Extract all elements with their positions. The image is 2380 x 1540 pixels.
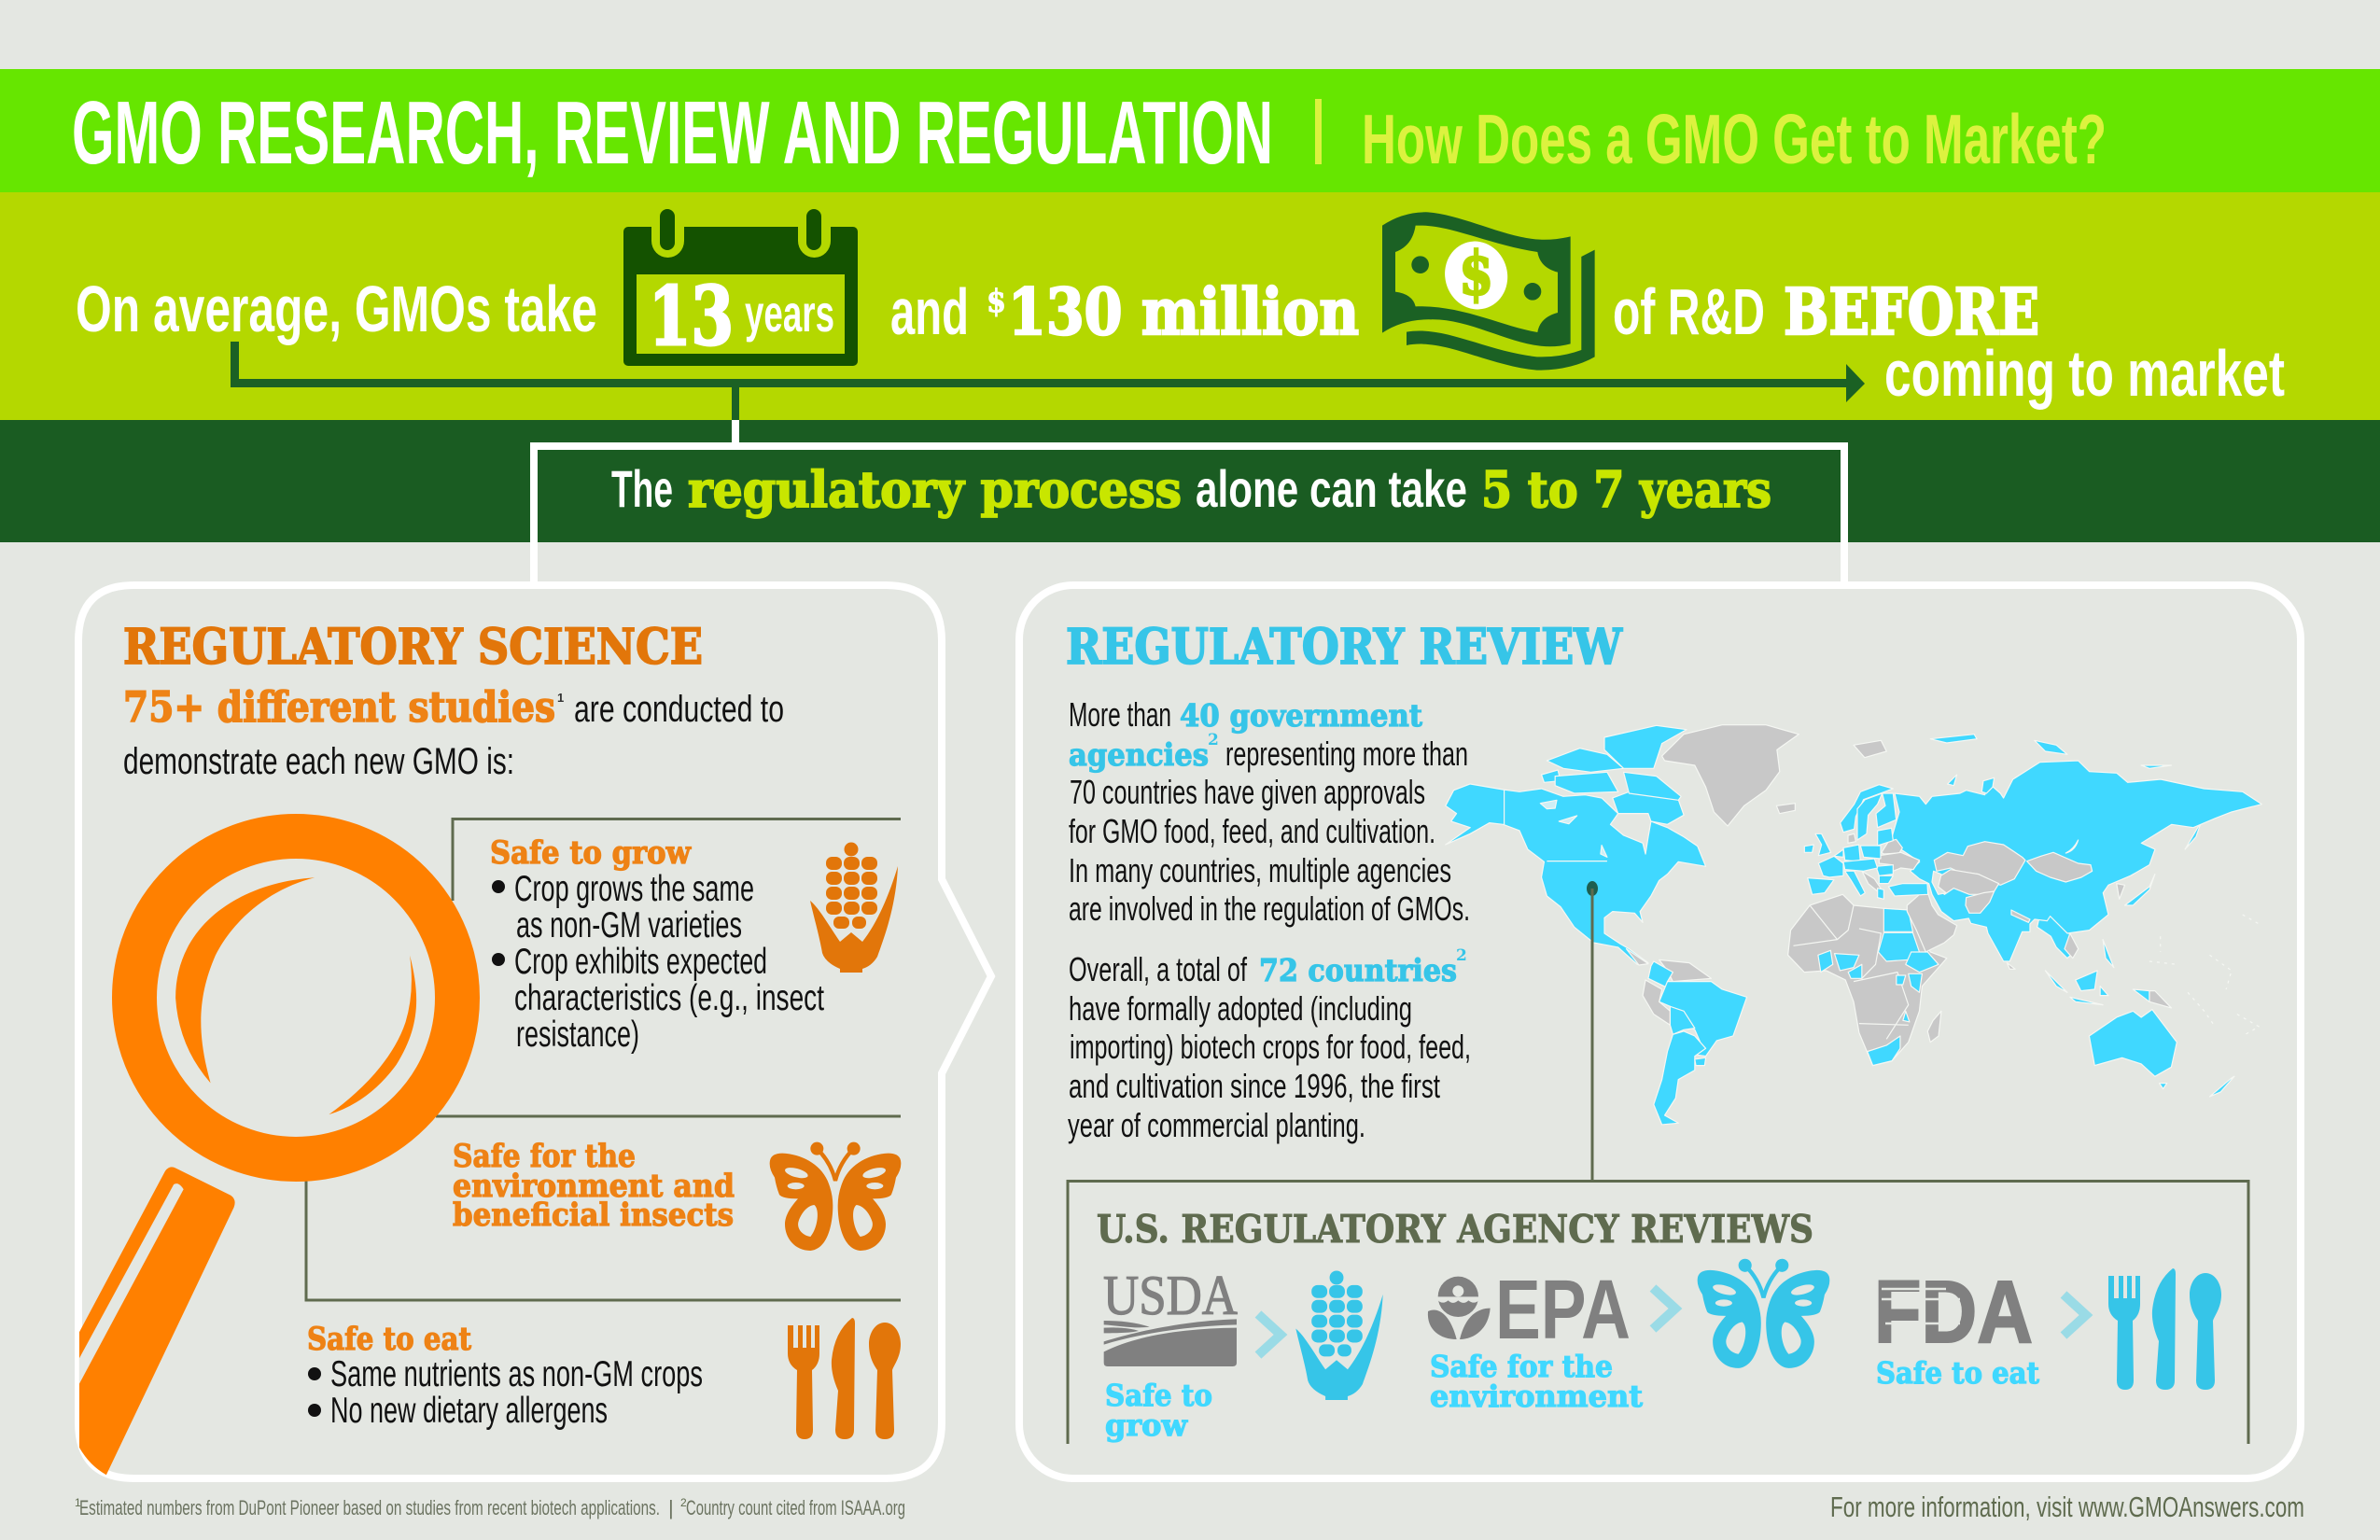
footnotes: | <box>668 1496 674 1519</box>
text: government agencies: agencies <box>1069 736 1209 773</box>
icon: magnifying glass <box>79 836 457 1475</box>
text: government agencies: More than <box>1069 695 1171 734</box>
label: safe for the environment: Safe for the <box>1430 1349 1613 1384</box>
text: 72 countries <box>1068 946 1471 1144</box>
block: safe to grow: Crop grows the same <box>514 869 754 909</box>
text: of R&D BEFORE <box>1613 275 2039 350</box>
map: world <box>1446 725 2261 1125</box>
block: safe to grow <box>490 834 824 1055</box>
panel outline <box>1019 585 2301 1478</box>
arrow: FDA to utensils <box>2064 1295 2086 1336</box>
footnotes: Estimated numbers from DuPont Pioneer based on studies from recent biotech applications. <box>79 1496 660 1519</box>
intro text: are conducted to <box>574 689 784 730</box>
label: safe for the environment <box>1430 1349 1643 1414</box>
logo: USDA: USDA <box>1103 1265 1238 1326</box>
text: 72 countries: have formally adopted (including <box>1069 989 1412 1028</box>
icon: calendar with 13 years: 13 <box>649 270 734 364</box>
text: government agencies: are involved in the regulation of GMOs. <box>1069 889 1470 928</box>
label: safe to eat: Safe to eat <box>1876 1355 2039 1391</box>
block: safe to grow: characteristics (e.g., insect <box>514 978 824 1018</box>
text: government agencies: 2 <box>1208 731 1219 749</box>
text: regulatory process alone can take 5 to 7 years: 5 to 7 years <box>1481 461 1771 519</box>
box heading: U.S. REGULATORY AGENCY REVIEWS <box>1097 1207 1813 1252</box>
text: regulatory process alone can take 5 to 7 years: alone can take <box>1196 459 1467 518</box>
logo: FDA: FDA <box>1874 1263 2033 1362</box>
band: yellow-green timeline band <box>0 192 2380 420</box>
label: safe to grow <box>1105 1378 1212 1443</box>
arrow: USDA to corn <box>1258 1314 1281 1355</box>
intro text: 75+ different studies <box>123 682 555 732</box>
intro text: demonstrate each new GMO is: <box>123 741 514 782</box>
text: 72 countries: and cultivation since 1996, the first <box>1069 1067 1440 1105</box>
icon: butterfly <box>1698 1259 1829 1368</box>
block: safe for the environment: beneficial insects <box>453 1197 734 1234</box>
title: GMO RESEARCH, REVIEW AND REGULATION <box>72 83 1273 183</box>
logo: EPA <box>1428 1264 1631 1357</box>
icon: fork knife spoon <box>788 1318 901 1439</box>
icon: corn <box>1295 1271 1383 1400</box>
icon: corn <box>810 842 898 973</box>
text: 72 countries: 72 countries <box>1259 952 1457 988</box>
panel: regulatory review <box>1019 585 2301 1478</box>
band: bright green title band <box>0 69 2380 192</box>
text: government agencies: In many countries, multiple agencies <box>1069 851 1451 889</box>
text: regulatory process alone can take 5 to 7 years <box>611 459 1771 519</box>
arrow: EPA to butterfly <box>1653 1288 1675 1329</box>
panel outline with arrow <box>78 585 991 1478</box>
text: regulatory process alone can take 5 to 7 years: The <box>611 459 673 518</box>
panel: regulatory science <box>78 585 991 1478</box>
block: safe to grow: resistance) <box>516 1015 639 1055</box>
block: safe for the environment <box>453 1138 735 1234</box>
icon: calendar with 13 years: years <box>745 284 834 343</box>
label: safe to grow: grow <box>1105 1407 1188 1443</box>
icon: butterfly <box>770 1142 901 1251</box>
heading: REGULATORY SCIENCE <box>123 619 703 676</box>
text: on average GMOs take: On average, GMOs take <box>76 273 597 345</box>
block: safe to eat: No new dietary allergens <box>330 1391 608 1431</box>
title divider <box>1315 99 1322 164</box>
map pointer <box>1587 881 1598 1181</box>
text: of R&D BEFORE: of R&D <box>1613 275 1765 348</box>
arrow: timeline <box>231 342 1865 420</box>
logo: USDA <box>1103 1265 1238 1366</box>
icon: fork knife spoon <box>2108 1268 2221 1390</box>
heading: REGULATORY REVIEW <box>1066 619 1623 676</box>
text: and $130 million: and <box>890 275 969 348</box>
text: and $130 million: $ <box>987 283 1006 320</box>
block: safe to eat: Safe to eat <box>307 1321 471 1358</box>
block: safe to grow: Crop exhibits expected <box>514 942 767 982</box>
footnotes: 2 <box>680 1496 687 1509</box>
text: government agencies <box>1069 695 1470 928</box>
icon: money bills <box>1382 212 1595 371</box>
label: safe for the environment: environment <box>1430 1379 1643 1414</box>
icon: calendar with 13 years <box>623 209 858 366</box>
text: and $130 million: 130 million <box>1008 275 1359 350</box>
text: 72 countries: Overall, a total of <box>1069 950 1248 988</box>
intro text: 1 <box>557 691 564 705</box>
block: safe to eat: Same nutrients as non-GM crops <box>330 1354 703 1394</box>
footnotes: Country count cited from ISAAA.org <box>686 1496 905 1519</box>
label: safe to grow: Safe to <box>1105 1378 1212 1413</box>
text: government agencies: 70 countries have given approvals <box>1070 773 1425 811</box>
logo: EPA: EPA <box>1495 1264 1631 1357</box>
block: safe for the environment: Safe for the <box>453 1138 636 1175</box>
text: regulatory process alone can take 5 to 7 years: regulatory process <box>688 461 1182 519</box>
text: 72 countries: year of commercial planting. <box>1068 1106 1365 1144</box>
band: dark green regulatory band <box>0 420 2380 542</box>
intro text <box>123 682 784 782</box>
text: government agencies: 40 government <box>1180 697 1423 734</box>
text: 72 countries: 2 <box>1456 946 1467 965</box>
regulatory process bracket <box>534 420 1844 588</box>
text: government agencies: for GMO food, feed, and cultivation. <box>1069 812 1435 850</box>
block: safe to grow: Safe to grow <box>490 834 692 872</box>
text: of R&D BEFORE: BEFORE <box>1784 275 2039 350</box>
text: government agencies: representing more than <box>1225 735 1468 773</box>
box: U.S. regulatory agency reviews <box>1068 1182 2248 1444</box>
section divider lines <box>306 819 901 1300</box>
block: safe to grow: as non-GM varieties <box>516 905 742 945</box>
block: safe to eat <box>307 1321 703 1431</box>
footnotes: 1 <box>75 1496 81 1509</box>
icon: money bills: $ <box>1459 239 1493 308</box>
text: 72 countries: importing) biotech crops for food, feed, <box>1070 1028 1471 1066</box>
block: safe for the environment: environment and <box>453 1168 735 1205</box>
text: and $130 million <box>890 275 1359 350</box>
